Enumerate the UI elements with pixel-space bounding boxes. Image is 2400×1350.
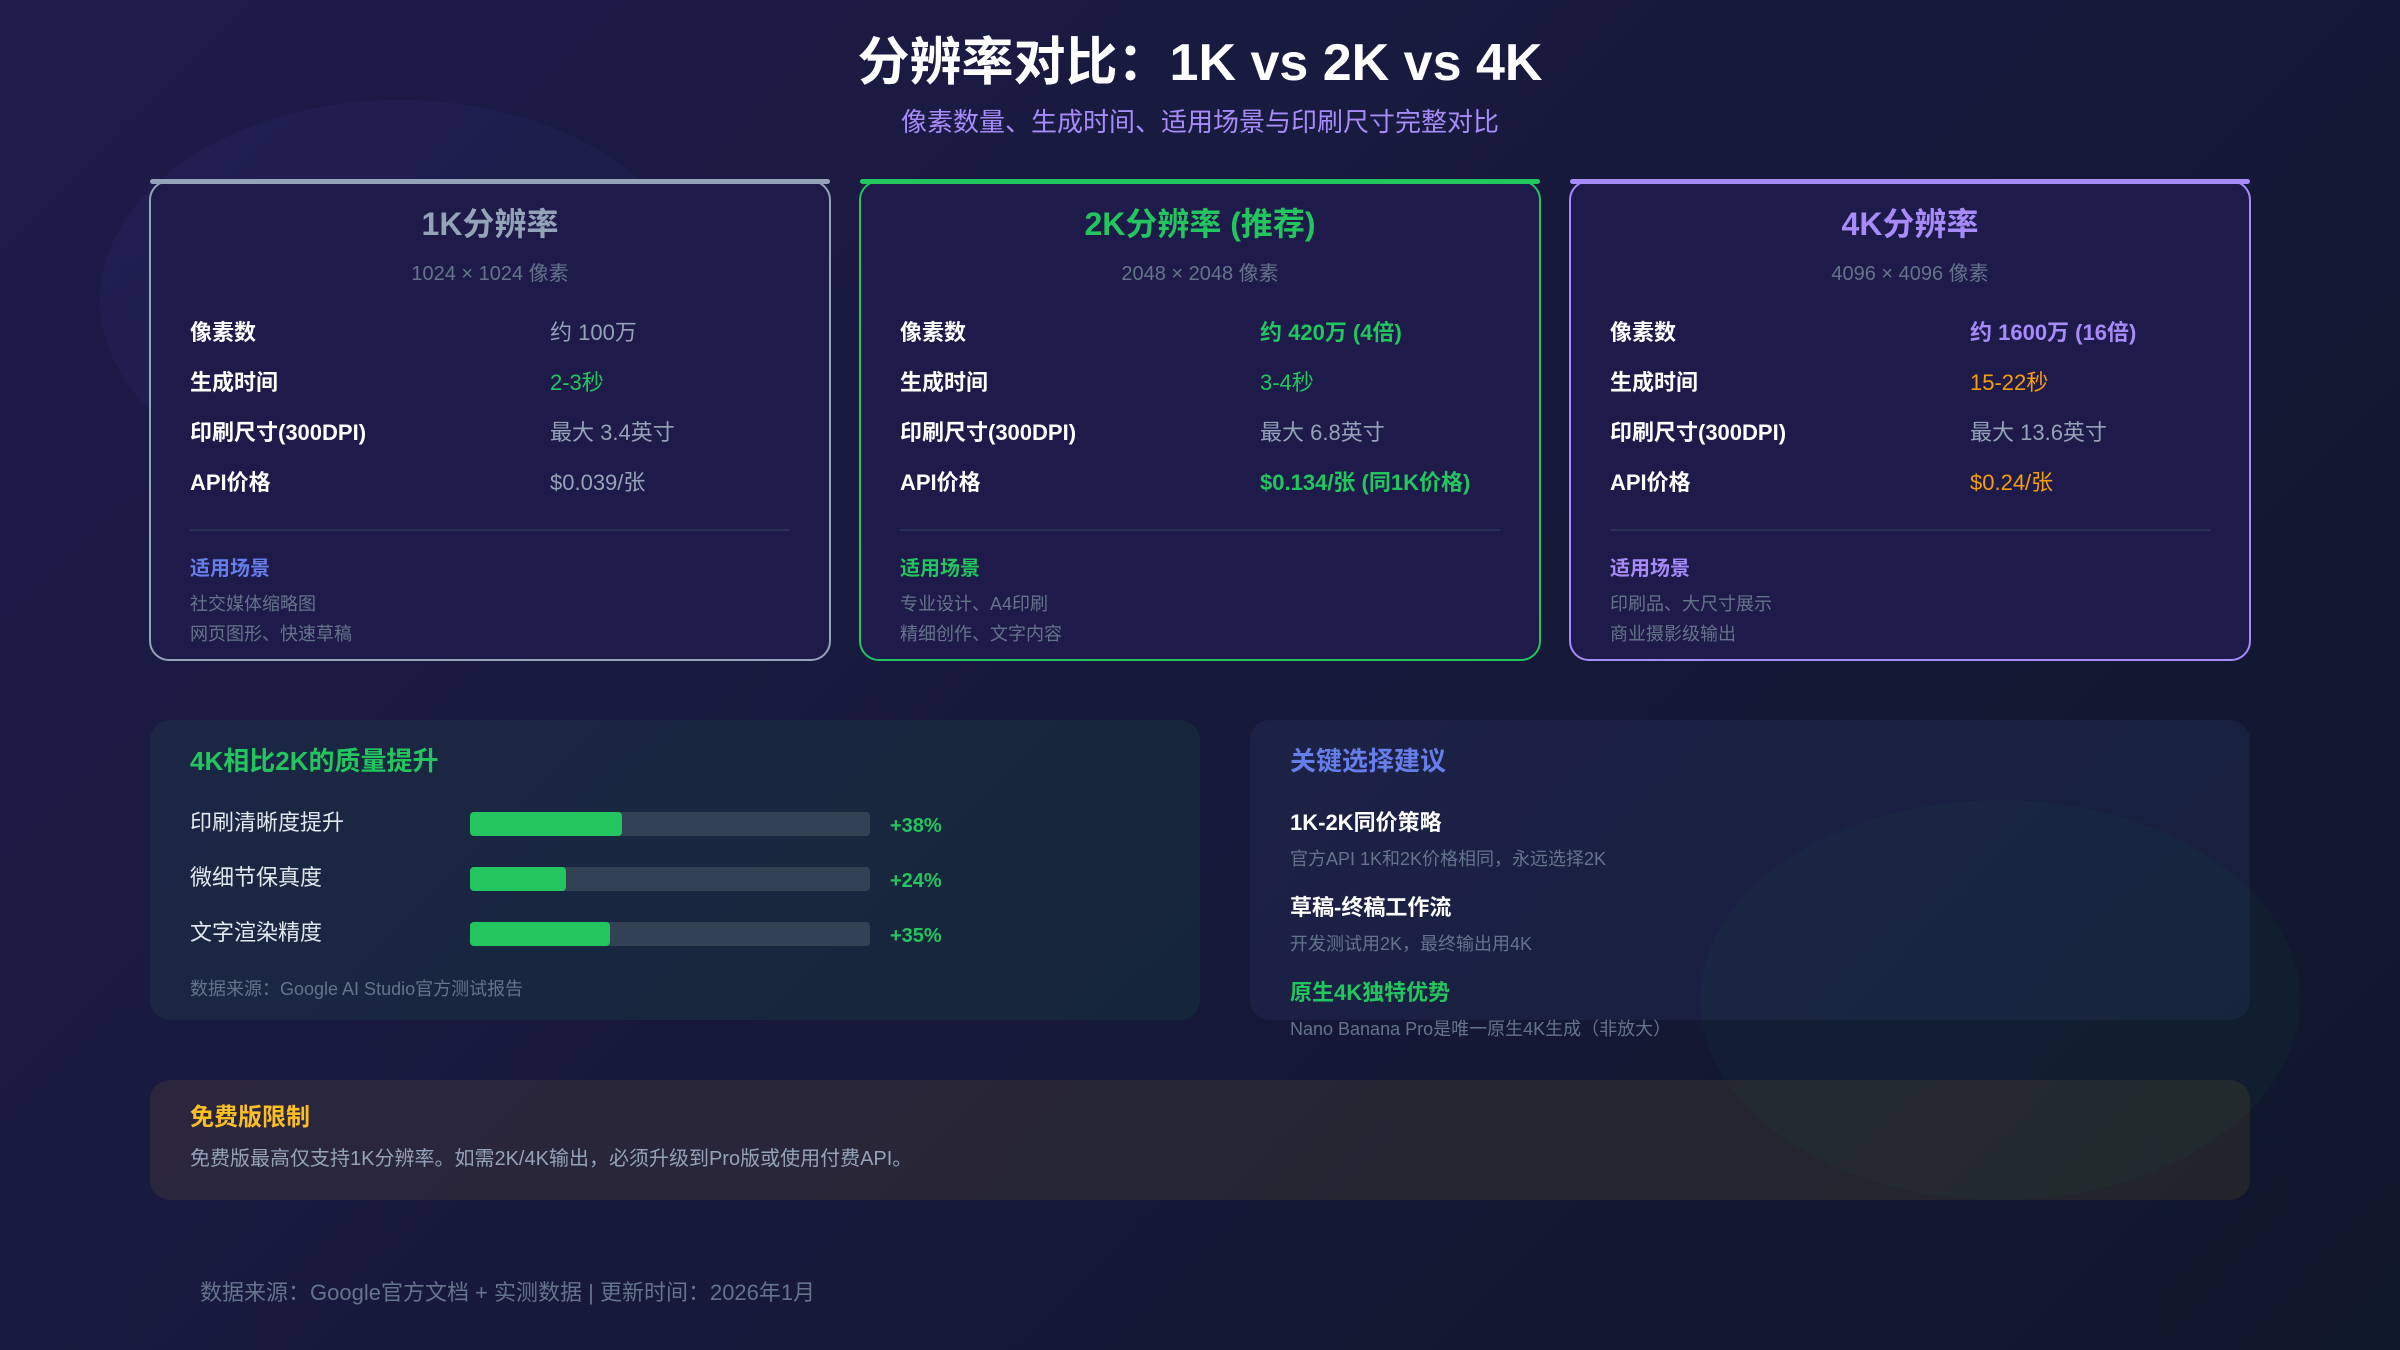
1K pixel count row: 约 100万 [550, 320, 637, 345]
bar: print sharpness +38%: 印刷清晰度提升 [190, 810, 344, 835]
1K print size row [190, 420, 675, 445]
tip: native 4K advantage: Nano Banana Pro是唯一原生4K生成（非放大） [1290, 1019, 1671, 1039]
4K generation time row [1610, 370, 2048, 395]
4K use cases: 商业摄影级输出 [1610, 624, 1736, 644]
panel: 1K card [149, 179, 831, 661]
2K use cases [900, 558, 1062, 644]
tip: native 4K advantage [1290, 980, 1671, 1039]
2K pixel count row [900, 320, 1402, 345]
callout heading: 免费版限制 [190, 1104, 310, 1131]
panel: free tier limitation callout [150, 1080, 2250, 1200]
panel: key recommendations [1250, 720, 2250, 1020]
1K generation time row [190, 370, 604, 395]
2K use cases: 精细创作、文字内容 [900, 624, 1062, 644]
bar: print sharpness +38% [190, 810, 942, 837]
tip: native 4K advantage: 原生4K独特优势 [1290, 980, 1450, 1005]
4K generation time row: 15-22秒 [1970, 370, 2048, 395]
1K use cases: 适用场景 [190, 558, 270, 580]
2K pixel count row: 约 420万 (4倍) [1260, 320, 1402, 345]
4K pixel count row: 约 1600万 (16倍) [1970, 320, 2136, 345]
2K API price row: $0.134/张 (同1K价格) [1260, 470, 1470, 495]
4K pixel count row [1610, 320, 2136, 345]
tip: draft to final workflow [1290, 895, 1532, 954]
bar: text rendering +35%: +35% [890, 925, 942, 947]
4K print size row: 印刷尺寸(300DPI) [1610, 420, 1786, 445]
1K heading: 1K分辨率 [422, 206, 558, 242]
1K API price row: $0.039/张 [550, 470, 645, 495]
callout text: 免费版最高仅支持1K分辨率。如需2K/4K输出，必须升级到Pro版或使用付费API。 [190, 1148, 912, 1170]
footer source: 数据来源：Google官方文档 + 实测数据 | 更新时间：2026年1月 [200, 1280, 815, 1305]
1K generation time row: 2-3秒 [550, 370, 604, 395]
tip: draft to final workflow: 草稿-终稿工作流 [1290, 895, 1451, 920]
subtitle: 像素数量、生成时间、适用场景与印刷尺寸完整对比 [901, 107, 1499, 137]
2K print size row: 印刷尺寸(300DPI) [900, 420, 1076, 445]
bar: text rendering +35% [190, 920, 942, 947]
chart source note: 数据来源：Google AI Studio官方测试报告 [190, 979, 523, 999]
4K API price row [1610, 470, 2053, 495]
4K API price row: API价格 [1610, 470, 1691, 495]
bar: text rendering +35%: 文字渲染精度 [190, 920, 322, 945]
recommendations heading: 关键选择建议 [1290, 746, 1446, 776]
panel: quality improvement bar chart [150, 720, 1200, 1020]
2K heading: 2K分辨率 (推荐) [1084, 206, 1316, 242]
4K dimensions: 4096 × 4096 像素 [1831, 263, 1989, 285]
2K generation time row: 3-4秒 [1260, 370, 1314, 395]
1K use cases: 网页图形、快速草稿 [190, 624, 352, 644]
tip: same-price strategy [1290, 810, 1606, 869]
panel: 2K card [859, 179, 1541, 661]
chart heading: 4K相比2K的质量提升 [190, 746, 438, 776]
title: 分辨率对比：1K vs 2K vs 4K [858, 34, 1542, 92]
4K use cases: 适用场景 [1610, 558, 1690, 580]
1K API price row [190, 470, 645, 495]
2K print size row: 最大 6.8英寸 [1260, 420, 1385, 445]
1K print size row: 最大 3.4英寸 [550, 420, 675, 445]
4K pixel count row: 像素数 [1610, 320, 1676, 345]
1K pixel count row: 像素数 [190, 320, 256, 345]
2K use cases: 适用场景 [900, 558, 980, 580]
2K generation time row [900, 370, 1314, 395]
bar: fine detail +24% [190, 865, 942, 892]
tip: draft to final workflow: 开发测试用2K，最终输出用4K [1290, 934, 1532, 954]
tip: same-price strategy: 官方API 1K和2K价格相同，永远选择2K [1290, 849, 1606, 869]
1K print size row: 印刷尺寸(300DPI) [190, 420, 366, 445]
4K print size row: 最大 13.6英寸 [1970, 420, 2107, 445]
1K use cases [190, 558, 352, 644]
2K print size row [900, 420, 1385, 445]
2K API price row [900, 470, 1470, 495]
4K generation time row: 生成时间 [1610, 370, 1698, 395]
tip: same-price strategy: 1K-2K同价策略 [1290, 810, 1442, 835]
bar: fine detail +24%: +24% [890, 870, 942, 892]
2K API price row: API价格 [900, 470, 981, 495]
1K API price row: API价格 [190, 470, 271, 495]
1K use cases: 社交媒体缩略图 [190, 594, 316, 614]
bar: print sharpness +38%: +38% [890, 815, 942, 837]
2K use cases: 专业设计、A4印刷 [900, 594, 1048, 614]
2K dimensions: 2048 × 2048 像素 [1121, 263, 1279, 285]
1K dimensions: 1024 × 1024 像素 [411, 263, 569, 285]
4K print size row [1610, 420, 2107, 445]
4K API price row: $0.24/张 [1970, 470, 2053, 495]
1K pixel count row [190, 320, 637, 345]
1K generation time row: 生成时间 [190, 370, 278, 395]
2K generation time row: 生成时间 [900, 370, 988, 395]
decorative ellipse: bottom right [1700, 800, 2300, 1200]
decorative ellipse: top left [100, 100, 700, 500]
4K use cases: 印刷品、大尺寸展示 [1610, 594, 1772, 614]
panel: 4K card [1569, 179, 2251, 661]
4K use cases [1610, 558, 1772, 644]
2K pixel count row: 像素数 [900, 320, 966, 345]
bar: fine detail +24%: 微细节保真度 [190, 865, 322, 890]
4K heading: 4K分辨率 [1842, 206, 1978, 242]
